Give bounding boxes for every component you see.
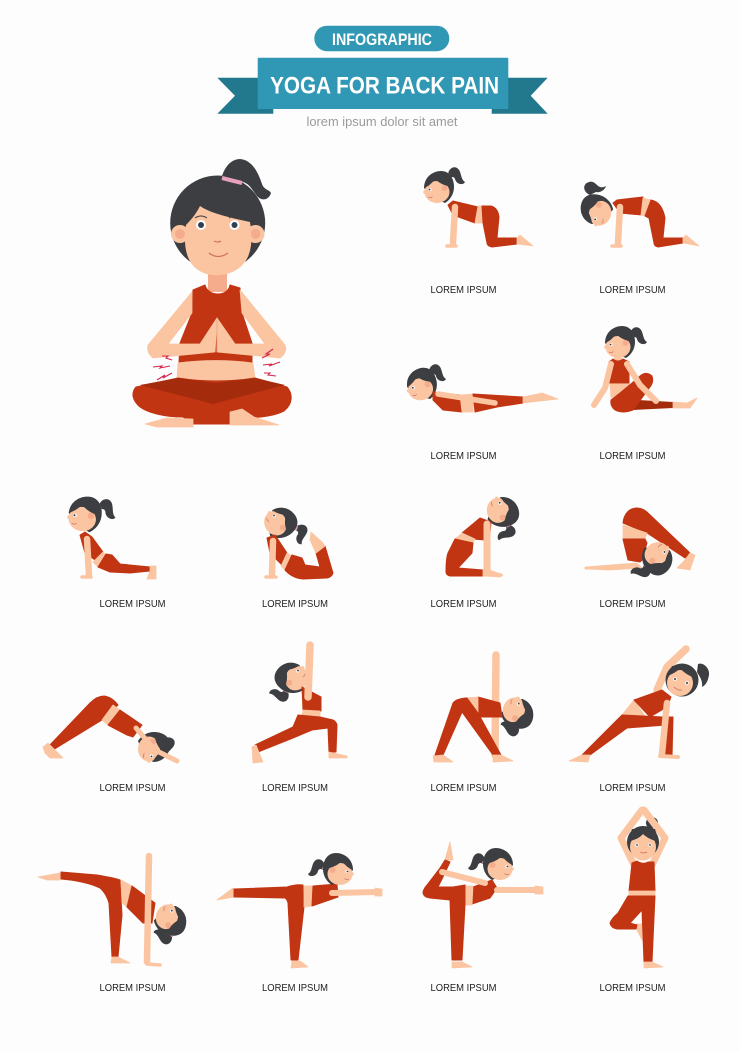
pose: side angle xyxy=(569,649,709,794)
ribbon tails xyxy=(217,78,548,114)
nose and mouth xyxy=(209,241,228,256)
caption: LOREM IPSUM xyxy=(100,983,166,994)
pose: downward dog xyxy=(43,696,179,794)
caption: LOREM IPSUM xyxy=(600,451,666,462)
pain bolts xyxy=(153,349,280,380)
header xyxy=(217,26,548,129)
pill badge xyxy=(314,26,449,51)
arms in prayer xyxy=(148,290,286,358)
pose: half moon xyxy=(38,856,191,994)
caption: LOREM IPSUM xyxy=(262,783,328,794)
pose: cat xyxy=(423,167,533,296)
caption: LOREM IPSUM xyxy=(100,783,166,794)
pose: dancer xyxy=(423,842,543,994)
pose: cow xyxy=(576,182,699,296)
pill text: INFOGRAPHIC xyxy=(332,31,432,49)
caption: LOREM IPSUM xyxy=(600,285,666,296)
title: YOGA FOR BACK PAIN xyxy=(270,72,499,99)
caption: LOREM IPSUM xyxy=(600,783,666,794)
caption: LOREM IPSUM xyxy=(430,783,496,794)
caption: LOREM IPSUM xyxy=(430,983,496,994)
caption: LOREM IPSUM xyxy=(100,599,166,610)
caption: LOREM IPSUM xyxy=(600,599,666,610)
pose: triangle xyxy=(430,655,538,794)
pose: camel xyxy=(430,495,520,610)
pants xyxy=(133,378,291,424)
head front xyxy=(627,826,659,860)
head front xyxy=(666,664,709,696)
pose: bow xyxy=(259,501,333,610)
hair xyxy=(170,176,265,270)
red tank top xyxy=(179,285,252,363)
pose: cobra xyxy=(65,494,166,610)
pose: warrior three xyxy=(217,853,382,994)
neck xyxy=(208,268,227,292)
caption: LOREM IPSUM xyxy=(600,983,666,994)
caption: LOREM IPSUM xyxy=(262,599,328,610)
face xyxy=(185,206,251,275)
midriff xyxy=(177,360,255,381)
pose: seated twist xyxy=(594,326,697,462)
subtitle: lorem ipsum dolor sit amet xyxy=(306,114,458,129)
main figure: seated lotus with back pain xyxy=(133,159,291,427)
feet xyxy=(145,409,279,427)
caption: LOREM IPSUM xyxy=(262,983,328,994)
pose: crescent lunge xyxy=(252,645,347,794)
eyes xyxy=(195,216,241,230)
caption: LOREM IPSUM xyxy=(430,599,496,610)
pose: plow xyxy=(585,508,695,610)
ponytail xyxy=(221,159,271,199)
pose: tree xyxy=(600,810,666,994)
title banner xyxy=(258,58,508,109)
ears xyxy=(171,225,264,243)
dark lap xyxy=(140,378,285,404)
pose: locust xyxy=(404,364,558,462)
caption: LOREM IPSUM xyxy=(430,451,496,462)
caption: LOREM IPSUM xyxy=(430,285,496,296)
